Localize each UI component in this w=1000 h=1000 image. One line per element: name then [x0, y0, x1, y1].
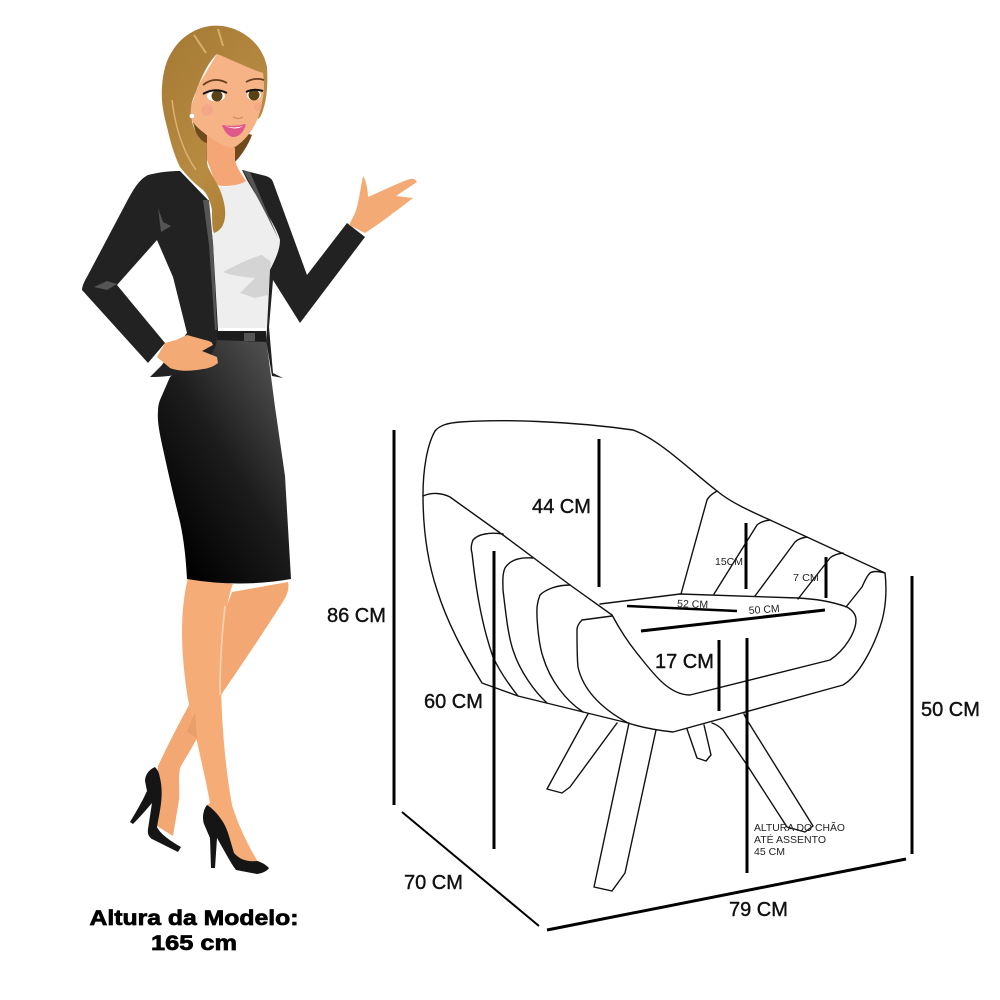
dimension: 17 cm: [655, 640, 719, 711]
dimension: 70 cm depth: 70 CM: [404, 872, 463, 894]
front shoe: [203, 805, 269, 874]
dimension: 45 cm floor to seat: [747, 638, 845, 873]
caption: model height: [90, 907, 298, 955]
model illustration: [82, 26, 417, 874]
back hair: [190, 112, 252, 165]
left arm and jacket: [82, 171, 218, 377]
chair line drawing: [423, 421, 886, 891]
chair legs: [547, 714, 813, 891]
chair arm and seat front: [423, 493, 856, 695]
dimension: 52 cm: [627, 598, 737, 611]
left lapel: [203, 200, 217, 330]
belt: [217, 331, 266, 342]
dimension: 60 cm: 60 CM: [424, 691, 483, 713]
eyebrows: [203, 79, 264, 85]
skirt: [158, 338, 291, 584]
hip hand: [157, 335, 218, 371]
caption: model height: 165 cm: [151, 932, 237, 955]
dimension: 15 cm: [715, 523, 746, 589]
eyes: [203, 90, 263, 102]
dimension: 15 cm: 15CM: [715, 556, 743, 568]
calf shadow: [187, 712, 197, 738]
back leg: [156, 582, 288, 836]
right hand: [349, 176, 417, 233]
earring: [190, 114, 194, 118]
face: [189, 54, 265, 148]
dimension: 44 cm: 44 CM: [532, 496, 591, 518]
dimension: 50 cm seat: [641, 603, 825, 631]
dimension: 79 cm width: 79 CM: [729, 899, 788, 921]
right arm and jacket: [242, 170, 365, 378]
dimension: 50 cm seat: 50 CM: [748, 603, 780, 617]
dimension: 45 cm floor to seat: 45 CM: [754, 846, 785, 858]
dimension: 79 cm width: [547, 859, 906, 930]
caption: model height: Altura da Modelo:: [90, 907, 298, 930]
backrest ribs: [681, 491, 885, 607]
sleeve highlights: [94, 208, 304, 298]
hair highlight: [194, 29, 223, 53]
left arm ribs: [471, 533, 628, 723]
nose: [233, 117, 243, 118]
knee highlight: [220, 606, 225, 695]
blush: [201, 103, 262, 116]
neck: [207, 135, 246, 186]
lips: [222, 124, 246, 137]
hair: [162, 26, 267, 233]
dimension: 52 cm: 52 CM: [677, 598, 708, 611]
dimension: 45 cm floor to seat: ALTURA DO CHÃO: [754, 821, 845, 834]
dimension: 7 cm: [793, 557, 826, 598]
back shoe: [130, 767, 181, 852]
shirt: [210, 180, 280, 328]
hair strand highlight: [172, 100, 196, 170]
dimension: 50 cm right: 50 CM: [921, 699, 980, 721]
dimension: 45 cm floor to seat: ATÉ ASSENTO: [754, 833, 826, 846]
chair outer shell: [423, 421, 886, 732]
teeth: [225, 126, 243, 128]
dimension: 86 cm height: 86 CM: [327, 605, 386, 627]
dimension: 7 cm: 7 CM: [793, 572, 819, 584]
shirt shadow: [223, 255, 271, 298]
belt buckle: [244, 333, 255, 341]
dimension: 17 cm: 17 CM: [655, 651, 714, 673]
front leg: [182, 578, 258, 868]
dimension: 70 cm depth: [402, 812, 539, 926]
right lapel: [243, 170, 278, 238]
